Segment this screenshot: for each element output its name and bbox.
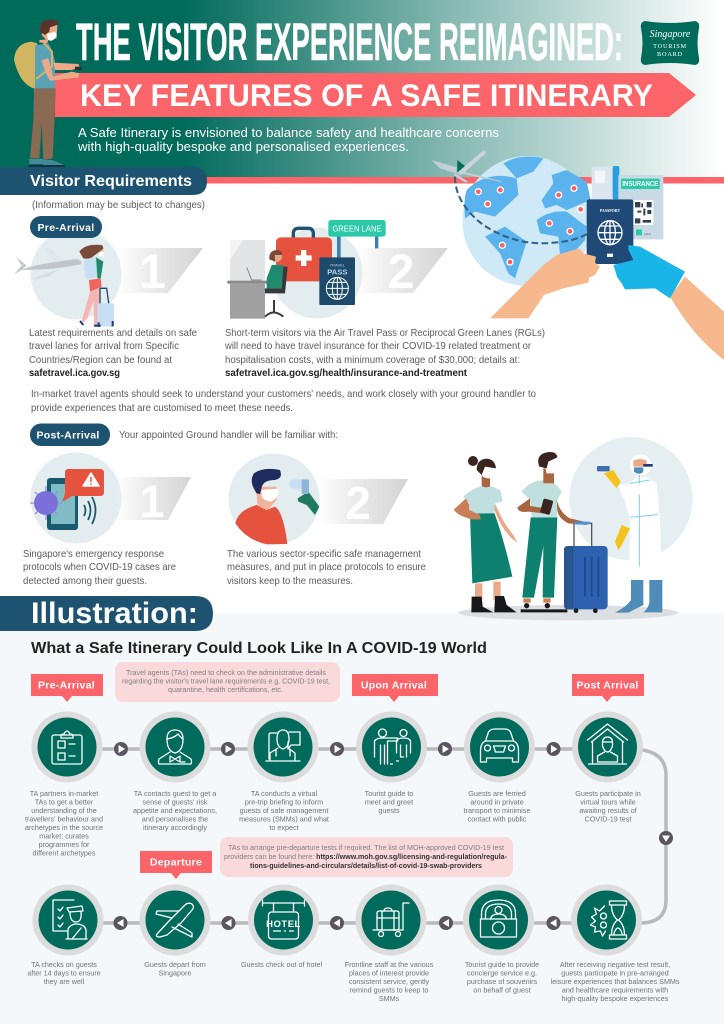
note: (Information may be subject to changes): [32, 200, 205, 211]
caption: step 3: pre-trip briefing to inform: [245, 798, 323, 806]
note: pre-departure tests: providers can be found here: https://www.moh.gov.sg/licensing-and-regulation/regula-: [224, 852, 507, 861]
pre-arrival pill: [30, 216, 102, 238]
intro text: with high-quality bespoke and personalised experiences.: [77, 139, 409, 154]
caption: step 6: Guests participate in: [575, 789, 641, 798]
post-arrival pill: [30, 424, 110, 446]
caption: safetravel.ica.gov.sg: [29, 368, 120, 379]
illustration: travellers being temperature-screened: [454, 437, 693, 620]
illustration: desk, medical bag, green lane sign and travel pass: GREEN LANE: [332, 224, 382, 233]
boarding pass: [592, 166, 620, 202]
caption: step 2: and personalises the: [142, 814, 208, 824]
caption: step 5: around in private: [470, 798, 524, 806]
row 1 nodes: [32, 712, 643, 782]
illustration: man with mask and thermometer: [235, 469, 319, 544]
circle backdrop: [228, 454, 320, 544]
caption: step 8: purchase of souvenirs: [467, 977, 538, 986]
step 8: concierge: [463, 884, 534, 956]
ground shadow: [458, 605, 678, 620]
health worker in protective suit: [597, 454, 662, 613]
number 2: 2: [388, 246, 414, 299]
step 6: house with virtual tour: [572, 712, 643, 782]
in-market agents paragraph: In-market travel agents should seek to understand your customers' needs, and work closely with your ground handler to: [31, 389, 536, 400]
label: upon arrival: [352, 674, 438, 702]
caption: step 1: TA partners in-market: [30, 789, 98, 798]
number 1: 1: [139, 476, 165, 527]
caption: step 9: remind guests to keep to: [350, 986, 428, 994]
passport: PASSPORT: [600, 208, 621, 213]
caption: step 12: after 14 days to ensure: [27, 968, 101, 978]
caption: step 9: consistent service, gently: [349, 977, 430, 986]
caption: travel lanes for arrival from Specific: [29, 341, 179, 352]
step 11: plane: [140, 884, 210, 956]
number 2: 2: [345, 477, 371, 529]
caption: [29, 328, 197, 379]
illustration: desk, medical bag, green lane sign and travel pass: TRAVEL: [330, 263, 346, 268]
connector lines: [67, 749, 666, 923]
caption: detected among their guests.: [23, 576, 147, 587]
caption: Singapore's emergency response: [23, 549, 164, 560]
caption: step 8: on behalf of guest: [473, 986, 531, 994]
circle backdrop: [272, 228, 362, 318]
pre-arrival item 1: [14, 228, 203, 379]
heading pill: visitor requirements: [0, 167, 207, 195]
caption: The various sector-specific safe management: [227, 549, 421, 560]
heading pill: illustration: Illustration:: [31, 597, 198, 630]
row 1 arrows: [114, 742, 560, 756]
red strip: [200, 177, 724, 184]
caption: Latest requirements and details on safe: [29, 328, 197, 339]
caption: step 7: and healthcare requirements with: [562, 986, 668, 994]
note: pre-departure tests: TAs to arrange pre-departure tests if required. The list of MOH-approved COVID-19 test: [228, 843, 505, 852]
step 12: checklist and officer: [32, 884, 104, 956]
gloved hand: [613, 245, 685, 298]
caption: will need to have travel insurance for their COVID-19 related treatment or: [224, 341, 532, 352]
intro text: [77, 125, 499, 154]
illustration section background: [0, 613, 724, 1024]
caption: step 1: TAs to get a better: [35, 798, 94, 806]
caption: step 1: market; curates: [39, 832, 89, 840]
caption: step 8: concierge service e.g.: [467, 968, 537, 978]
caption: step 2: appetite and expectations,: [133, 806, 217, 815]
note: travel agents check: quarantine, health certifications, etc.: [168, 685, 283, 694]
row 2 arrows: [114, 916, 560, 930]
header band: [0, 0, 724, 177]
caption: step 2: sense of guests' risk: [143, 798, 208, 806]
caption: step 4: guests: [378, 806, 400, 815]
caption: [23, 549, 176, 587]
caption: step 1: travellers' behaviour and: [25, 814, 103, 824]
caption: step 3: to expect: [269, 823, 299, 832]
label: upon arrival: Upon Arrival: [361, 680, 427, 692]
number 2: [315, 477, 408, 529]
caption: step 1: different archetypes: [32, 848, 96, 858]
number 1: [115, 476, 191, 527]
caption: step 7: guests participate in pre-arranged: [561, 968, 669, 978]
post-arrival pill: Post-Arrival: [36, 430, 100, 442]
circle backdrop: [30, 228, 122, 320]
illustration: desk, medical bag, green lane sign and travel pass: [227, 220, 386, 319]
note: travel agents check: Travel agents (TAs) need to check on the administrative details: [126, 668, 326, 677]
subheading: What a Safe Itinerary Could Look Like In A COVID-19 World: [31, 640, 487, 657]
caption: step 1: understanding of the: [31, 806, 97, 815]
circle backdrop: [30, 452, 122, 544]
label: pre-arrival: Pre-Arrival: [38, 680, 95, 692]
caption: step 9: SMMs: [379, 994, 400, 1003]
note: pre-departure tests: [220, 837, 513, 877]
label: post arrival: Post Arrival: [576, 680, 639, 692]
icon: phone alert and virus: [30, 469, 104, 530]
caption: step 6: COVID-19 test: [585, 814, 631, 824]
caption: step 2: itinerary accordingly: [143, 823, 207, 832]
caption: step 9: Frontline staff at the various: [345, 960, 434, 969]
caption: step 7: high-quality bespoke experiences: [562, 994, 669, 1003]
caption: step 5: Guests are ferried: [468, 789, 526, 798]
row 2 nodes: [32, 884, 642, 956]
map pins: [475, 185, 584, 265]
logo: Singapore Tourism Board: BOARD: [657, 51, 683, 58]
illustration: aeroplane and traveller: [14, 245, 114, 327]
caption: step 2: TA contacts guest to get a: [134, 789, 216, 798]
step 2: person: [140, 712, 210, 782]
post-arrival item 1: [23, 452, 191, 587]
in-market agents paragraph: provide experiences that are customised to meet these needs.: [31, 403, 293, 414]
caption: safetravel.ica.gov.sg/health/insurance-and-treatment: [225, 368, 468, 379]
caption: step 4: meet and greet: [365, 798, 413, 806]
post-arrival item 2: [227, 454, 426, 587]
caption: step 1: archetypes in the source: [25, 823, 103, 832]
flight path: [455, 177, 588, 243]
caption: step 10: Guests check out of hotel: [241, 960, 322, 969]
step 10: hotel sign: HOTEL: [266, 919, 301, 930]
caption: protocols when COVID-19 cases are: [23, 562, 176, 573]
plane: [432, 151, 503, 183]
caption: step 3: TA conducts a virtual: [251, 789, 317, 798]
logo: Singapore Tourism Board: TOURISM: [653, 43, 687, 50]
note: pre-departure tests: tions-guidelines-and-circulars/details/list-of-covid-19-swab-providers: [250, 861, 482, 870]
passport: [587, 199, 633, 264]
caption: step 6: virtual tours while: [580, 798, 636, 806]
caption: Countries/Region can be found at: [29, 355, 172, 366]
caption: step 4: Tourist guide to: [365, 789, 413, 798]
pre-arrival pill: Pre-Arrival: [38, 222, 94, 234]
caption: Short-term visitors via the Air Travel Pass or Reciprocal Green Lanes (RGLs): [225, 328, 545, 339]
step 4: guide and guest: [356, 712, 427, 782]
label: post arrival: [572, 674, 644, 702]
post-arrival intro: Your appointed Ground handler will be familiar with:: [119, 430, 338, 441]
caption: step 9: places of interest provide: [349, 968, 429, 978]
in-market agents paragraph: [31, 389, 536, 414]
illustration: desk, medical bag, green lane sign and travel pass: PASS: [327, 268, 347, 277]
left hand: [490, 248, 600, 318]
note: travel agents check: regarding the visitor's travel lane requirements e.g. COVID-19 test,: [122, 676, 330, 686]
label: pre-arrival: [31, 674, 103, 702]
logo: Singapore Tourism Board: Singapore: [650, 29, 691, 40]
step 10: hotel sign: [248, 884, 319, 956]
step 1: clipboard: [32, 712, 102, 782]
label: departure: [140, 851, 212, 879]
number 2: [353, 246, 448, 299]
caption: hospitalisation costs, with a minimum coverage of $30,000; details at:: [225, 355, 520, 366]
caption: step 11: Singapore: [159, 968, 191, 978]
suitcase: [564, 522, 608, 613]
caption: step 8: Tourist guide to provide: [465, 960, 539, 969]
ribbon: key features: KEY FEATURES OF A SAFE ITINERARY: [80, 77, 653, 113]
caption: step 5: contact with public: [468, 814, 527, 824]
caption: visitors keep to the measures.: [227, 576, 353, 587]
illustration: globe, passport and hands: [432, 151, 724, 360]
insurance card: SAFE: [644, 232, 651, 236]
insurance card: [618, 175, 663, 239]
caption: step 7: leisure experiences that balances SMMs: [550, 977, 680, 986]
globe: [462, 156, 592, 286]
man: [517, 452, 588, 612]
caption: [227, 549, 426, 587]
circle backdrop: [569, 437, 693, 560]
label: departure: Departure: [150, 856, 202, 868]
pre-arrival item 2: [224, 220, 545, 379]
step 5: car: [464, 712, 535, 782]
note: travel agents check: [115, 662, 340, 702]
woman: [454, 456, 517, 612]
number 1: 1: [139, 246, 166, 299]
intro text: A Safe Itinerary is envisioned to balance safety and healthcare concerns: [78, 125, 499, 140]
caption: step 3: guests of safe management: [240, 806, 328, 815]
arrow down: [659, 831, 673, 845]
illustration: traveller with backpack: [14, 20, 82, 167]
step 7: virus and hourglass: [571, 884, 642, 956]
caption: step 5: transport to minimise: [464, 806, 530, 815]
caption: step 12: they are well: [44, 977, 85, 986]
insurance card: INSURANCE: [622, 181, 659, 188]
step 9: luggage trolley: [356, 884, 426, 956]
caption: step 1: programmes for: [39, 840, 90, 849]
caption: step 6: awaiting results of: [579, 806, 637, 815]
caption: step 12: TA checks on guests: [31, 960, 97, 969]
caption: step 11: Guests depart from: [144, 960, 206, 969]
caption: step 3: measures (SMMs) and what: [239, 814, 329, 824]
step 3: virtual doctor: [248, 712, 318, 782]
caption: [224, 328, 545, 379]
right arm: [670, 277, 724, 360]
logo: Singapore Tourism Board: [641, 21, 699, 65]
caption: measures, and put in place protocols to ensure: [227, 562, 426, 573]
heading pill: visitor requirements: Visitor Requirements: [30, 173, 192, 190]
number 1: [115, 246, 203, 299]
caption: step 7: After receiving negative test result,: [560, 960, 670, 969]
